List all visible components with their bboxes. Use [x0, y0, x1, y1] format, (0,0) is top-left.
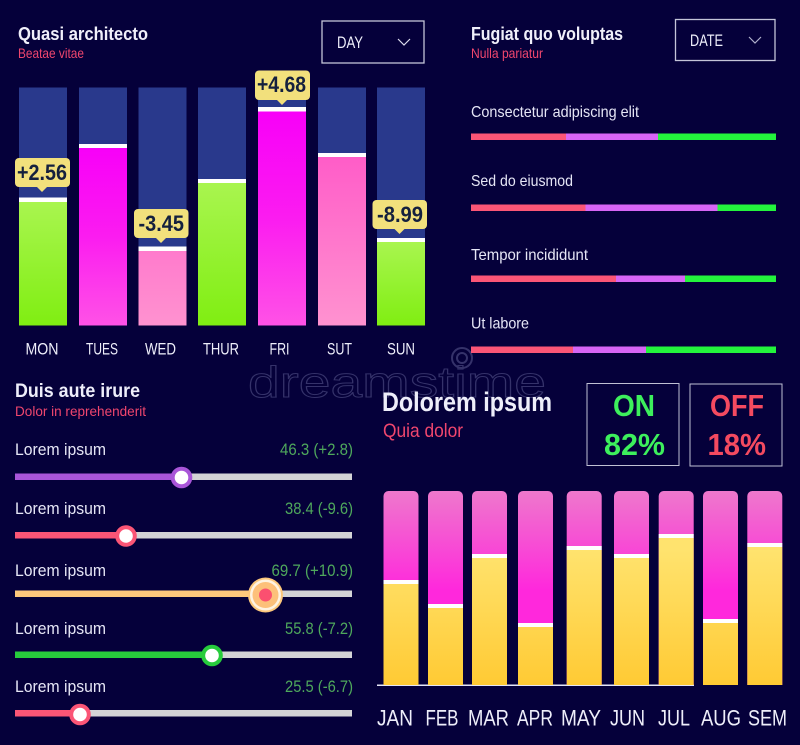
day labels: SUT: [327, 340, 352, 358]
row: Tempor incididunt: Tempor incididunt: [471, 247, 589, 264]
bar: Friday: [258, 88, 306, 326]
callout: -8.99: [372, 200, 427, 234]
subheading: Nulla pariatur: Nulla pariatur: [471, 45, 543, 61]
day labels: [26, 340, 415, 358]
stat box: ON 82%: [587, 384, 679, 466]
day labels: SUN: [387, 340, 415, 358]
callout: -3.45: [134, 209, 188, 243]
panel: monthly bar chart: [377, 384, 787, 730]
watermark: [248, 348, 546, 407]
bar: Monday: [19, 88, 67, 326]
row: Consectetur adipiscing elit: Consectetur adipiscing elit: [471, 104, 639, 121]
bar: Thursday: [198, 88, 246, 326]
panel: sliders: [15, 380, 353, 723]
day labels: WED: [145, 340, 176, 358]
stat box: OFF 18%: OFF: [710, 388, 764, 423]
bar: August: [703, 491, 738, 685]
month labels: SEM: [748, 706, 787, 730]
day labels: TUES: [86, 340, 118, 358]
row: Ut labore: [471, 316, 776, 353]
bar: Tuesday: [79, 88, 127, 326]
stat box: ON 82%: ON: [613, 388, 655, 423]
slider row 3: 69.7 (+10.9): [272, 562, 353, 580]
day labels: THUR: [203, 340, 239, 358]
slider row 1: 46.3 (+2.8): [280, 441, 353, 459]
dropdown: day: [322, 21, 424, 63]
stat box: OFF 18%: [690, 384, 782, 466]
bar: April: [518, 491, 553, 685]
subheading: Beatae vitae: Beatae vitae: [18, 45, 84, 61]
bar: February: [428, 491, 463, 685]
bar: Sunday: [377, 88, 425, 326]
slider row 1: [15, 440, 353, 486]
slider row 5: 25.5 (-6.7): [285, 678, 353, 696]
dropdown: day: DAY: [337, 34, 363, 52]
slider row 2: Lorem ipsum: [15, 499, 106, 518]
month labels: JAN: [377, 706, 413, 730]
heading: Dolorem ipsum: Dolorem ipsum: [382, 387, 552, 417]
month labels: FEB: [426, 706, 458, 730]
bar: May: [567, 491, 602, 685]
bar: Saturday: [318, 88, 366, 326]
slider row 3: Lorem ipsum: [15, 561, 106, 580]
stat box: ON 82%: 82%: [604, 427, 665, 462]
month labels: AUG: [701, 706, 741, 730]
row: Tempor incididunt: [471, 247, 776, 282]
callout: +4.68: +4.68: [257, 72, 306, 97]
heading: Duis aute irure: Duis aute irure: [15, 380, 140, 402]
row: Consectetur adipiscing elit: [471, 104, 776, 140]
dropdown: date: [676, 20, 775, 60]
day labels: FRI: [270, 340, 290, 358]
panel: weekly bar chart: [15, 21, 427, 358]
callout: +2.56: +2.56: [17, 160, 67, 185]
month labels: APR: [517, 706, 553, 730]
bar: July: [659, 491, 694, 685]
bar: June: [614, 491, 649, 685]
slider row 5: [15, 677, 353, 723]
callout: -3.45: -3.45: [138, 211, 184, 236]
bar: January: [384, 491, 418, 685]
month labels: MAY: [561, 706, 601, 730]
slider row 2: 38.4 (-9.6): [285, 500, 353, 518]
subheading: Quia dolor: Quia dolor: [383, 420, 463, 442]
row: Sed do eiusmod: [471, 173, 776, 211]
slider row 4: 55.8 (-7.2): [285, 620, 353, 638]
slider row 1: Lorem ipsum: [15, 440, 106, 459]
row: Ut labore: Ut labore: [471, 316, 529, 332]
month labels: MAR: [468, 706, 509, 730]
callout: +2.56: [15, 158, 70, 192]
slider row 4: [15, 619, 353, 664]
bar: Wednesday: [138, 88, 186, 326]
callout: -8.99: -8.99: [377, 202, 423, 227]
month labels: JUN: [610, 706, 645, 730]
heading: Quasi architecto: Quasi architecto: [18, 23, 148, 44]
callout: +4.68: [255, 70, 310, 105]
bar: March: [472, 491, 507, 685]
axis line: [377, 684, 694, 686]
panel: stacked progress bars: [471, 20, 776, 353]
heading: Fugiat quo voluptas: Fugiat quo voluptas: [471, 23, 623, 44]
month labels: [377, 706, 787, 730]
month labels: JUL: [658, 706, 690, 730]
watermark: dreamstime: [248, 358, 546, 407]
slider row 4: Lorem ipsum: [15, 619, 106, 638]
slider row 3: [15, 561, 353, 612]
slider row 5: Lorem ipsum: [15, 677, 106, 696]
row: Sed do eiusmod: Sed do eiusmod: [471, 173, 573, 190]
stat box: OFF 18%: 18%: [708, 427, 766, 462]
subheading: Dolor in reprehenderit: Dolor in reprehenderit: [15, 403, 146, 419]
slider row 2: [15, 499, 353, 545]
dropdown: date: DATE: [690, 32, 723, 50]
bar: September: [747, 491, 782, 685]
day labels: MON: [26, 340, 58, 358]
